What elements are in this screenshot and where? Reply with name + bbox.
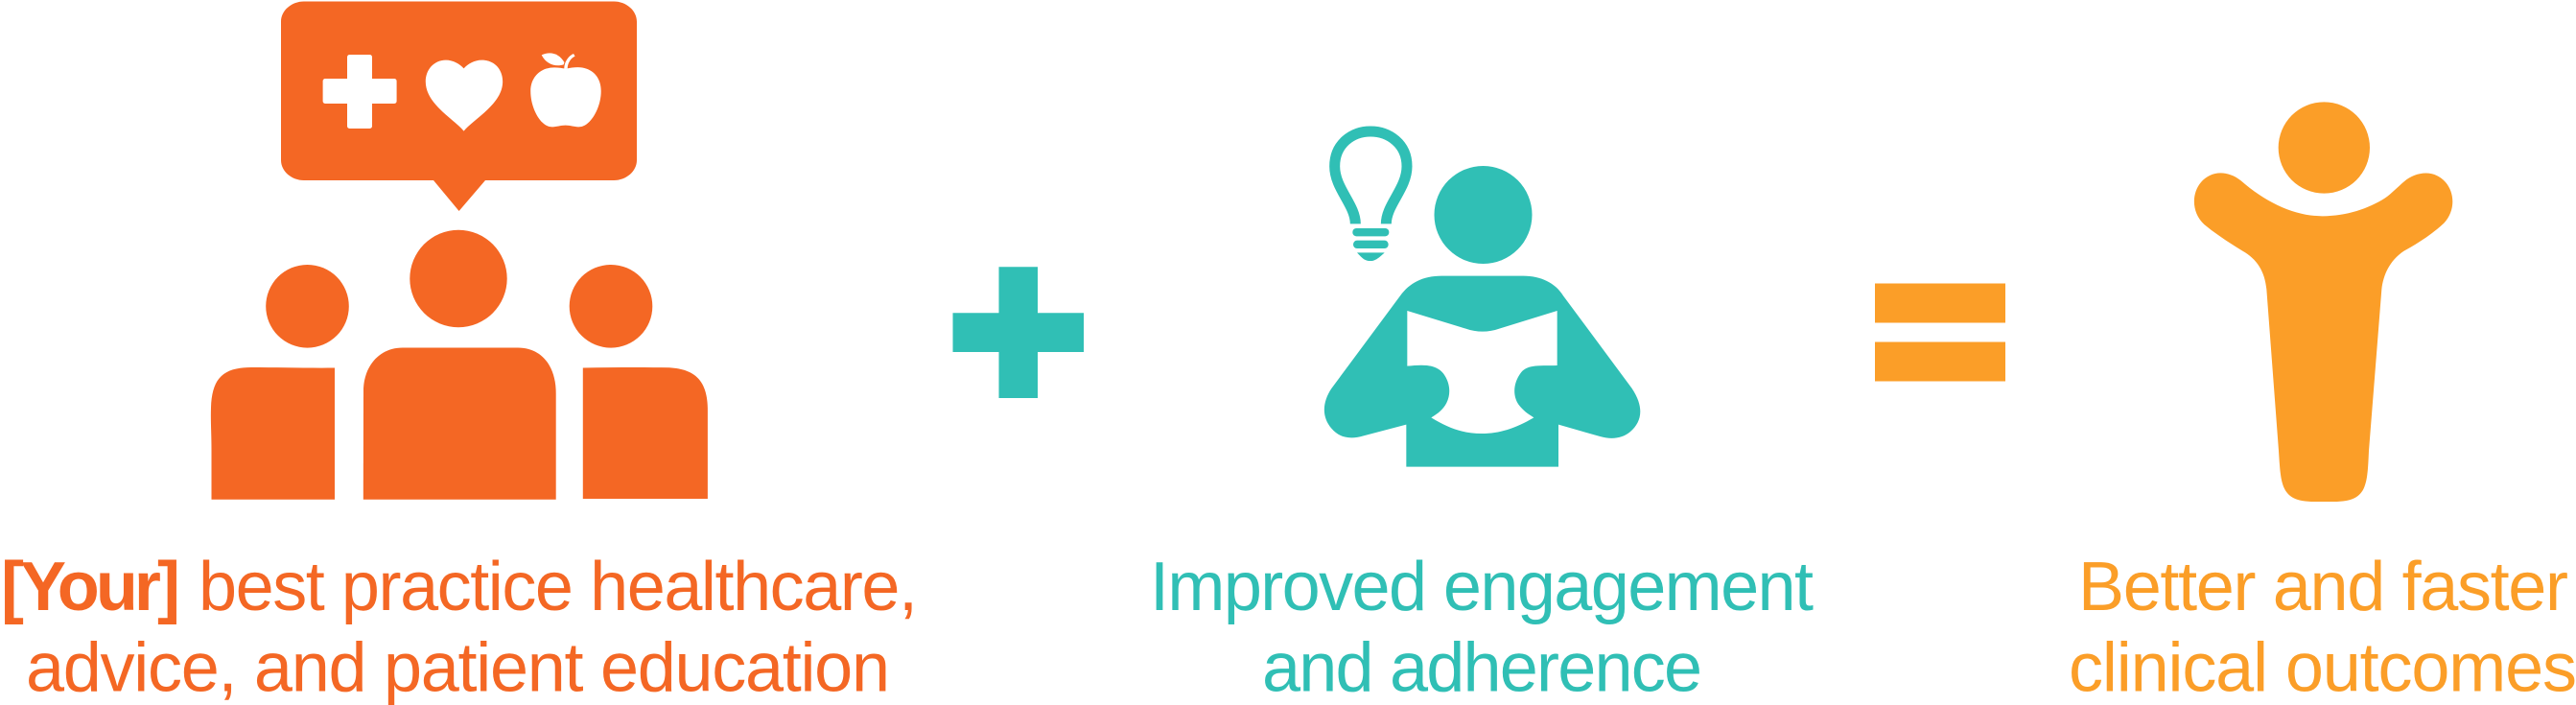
icon: heart <box>426 60 503 131</box>
plus sign <box>953 267 1084 398</box>
reader head <box>1434 166 1532 264</box>
centre person <box>363 230 556 500</box>
speech bubble <box>281 2 637 211</box>
caption: engagement <box>1150 549 1814 705</box>
caption: healthcare education: advice, and patient education <box>26 630 890 705</box>
caption: healthcare education: [Your] <box>1 549 180 625</box>
figure head <box>2279 102 2370 194</box>
icon: apple <box>530 53 601 127</box>
icon: group of three people <box>211 230 708 500</box>
left person <box>211 265 349 500</box>
icon: light bulb <box>1335 131 1407 261</box>
caption: clinical outcomes: clinical outcomes <box>2069 630 2576 705</box>
caption: engagement: and adherence <box>1262 630 1702 705</box>
icon: medical cross <box>323 55 397 129</box>
caption: clinical outcomes <box>2069 549 2576 705</box>
equals sign <box>1875 284 2005 382</box>
icon: speech bubble with health symbols <box>281 2 637 211</box>
caption: healthcare education: best practice healthcare, <box>199 549 918 625</box>
caption: engagement: Improved engagement <box>1150 549 1814 625</box>
caption: clinical outcomes: Better and faster <box>2078 549 2568 625</box>
figure body <box>2194 173 2452 502</box>
right person <box>570 265 708 499</box>
icon: person with raised arms <box>2194 102 2452 502</box>
reader body and open book <box>1324 276 1640 467</box>
icon: person reading with light bulb <box>1324 131 1640 467</box>
caption: healthcare education <box>1 549 918 705</box>
